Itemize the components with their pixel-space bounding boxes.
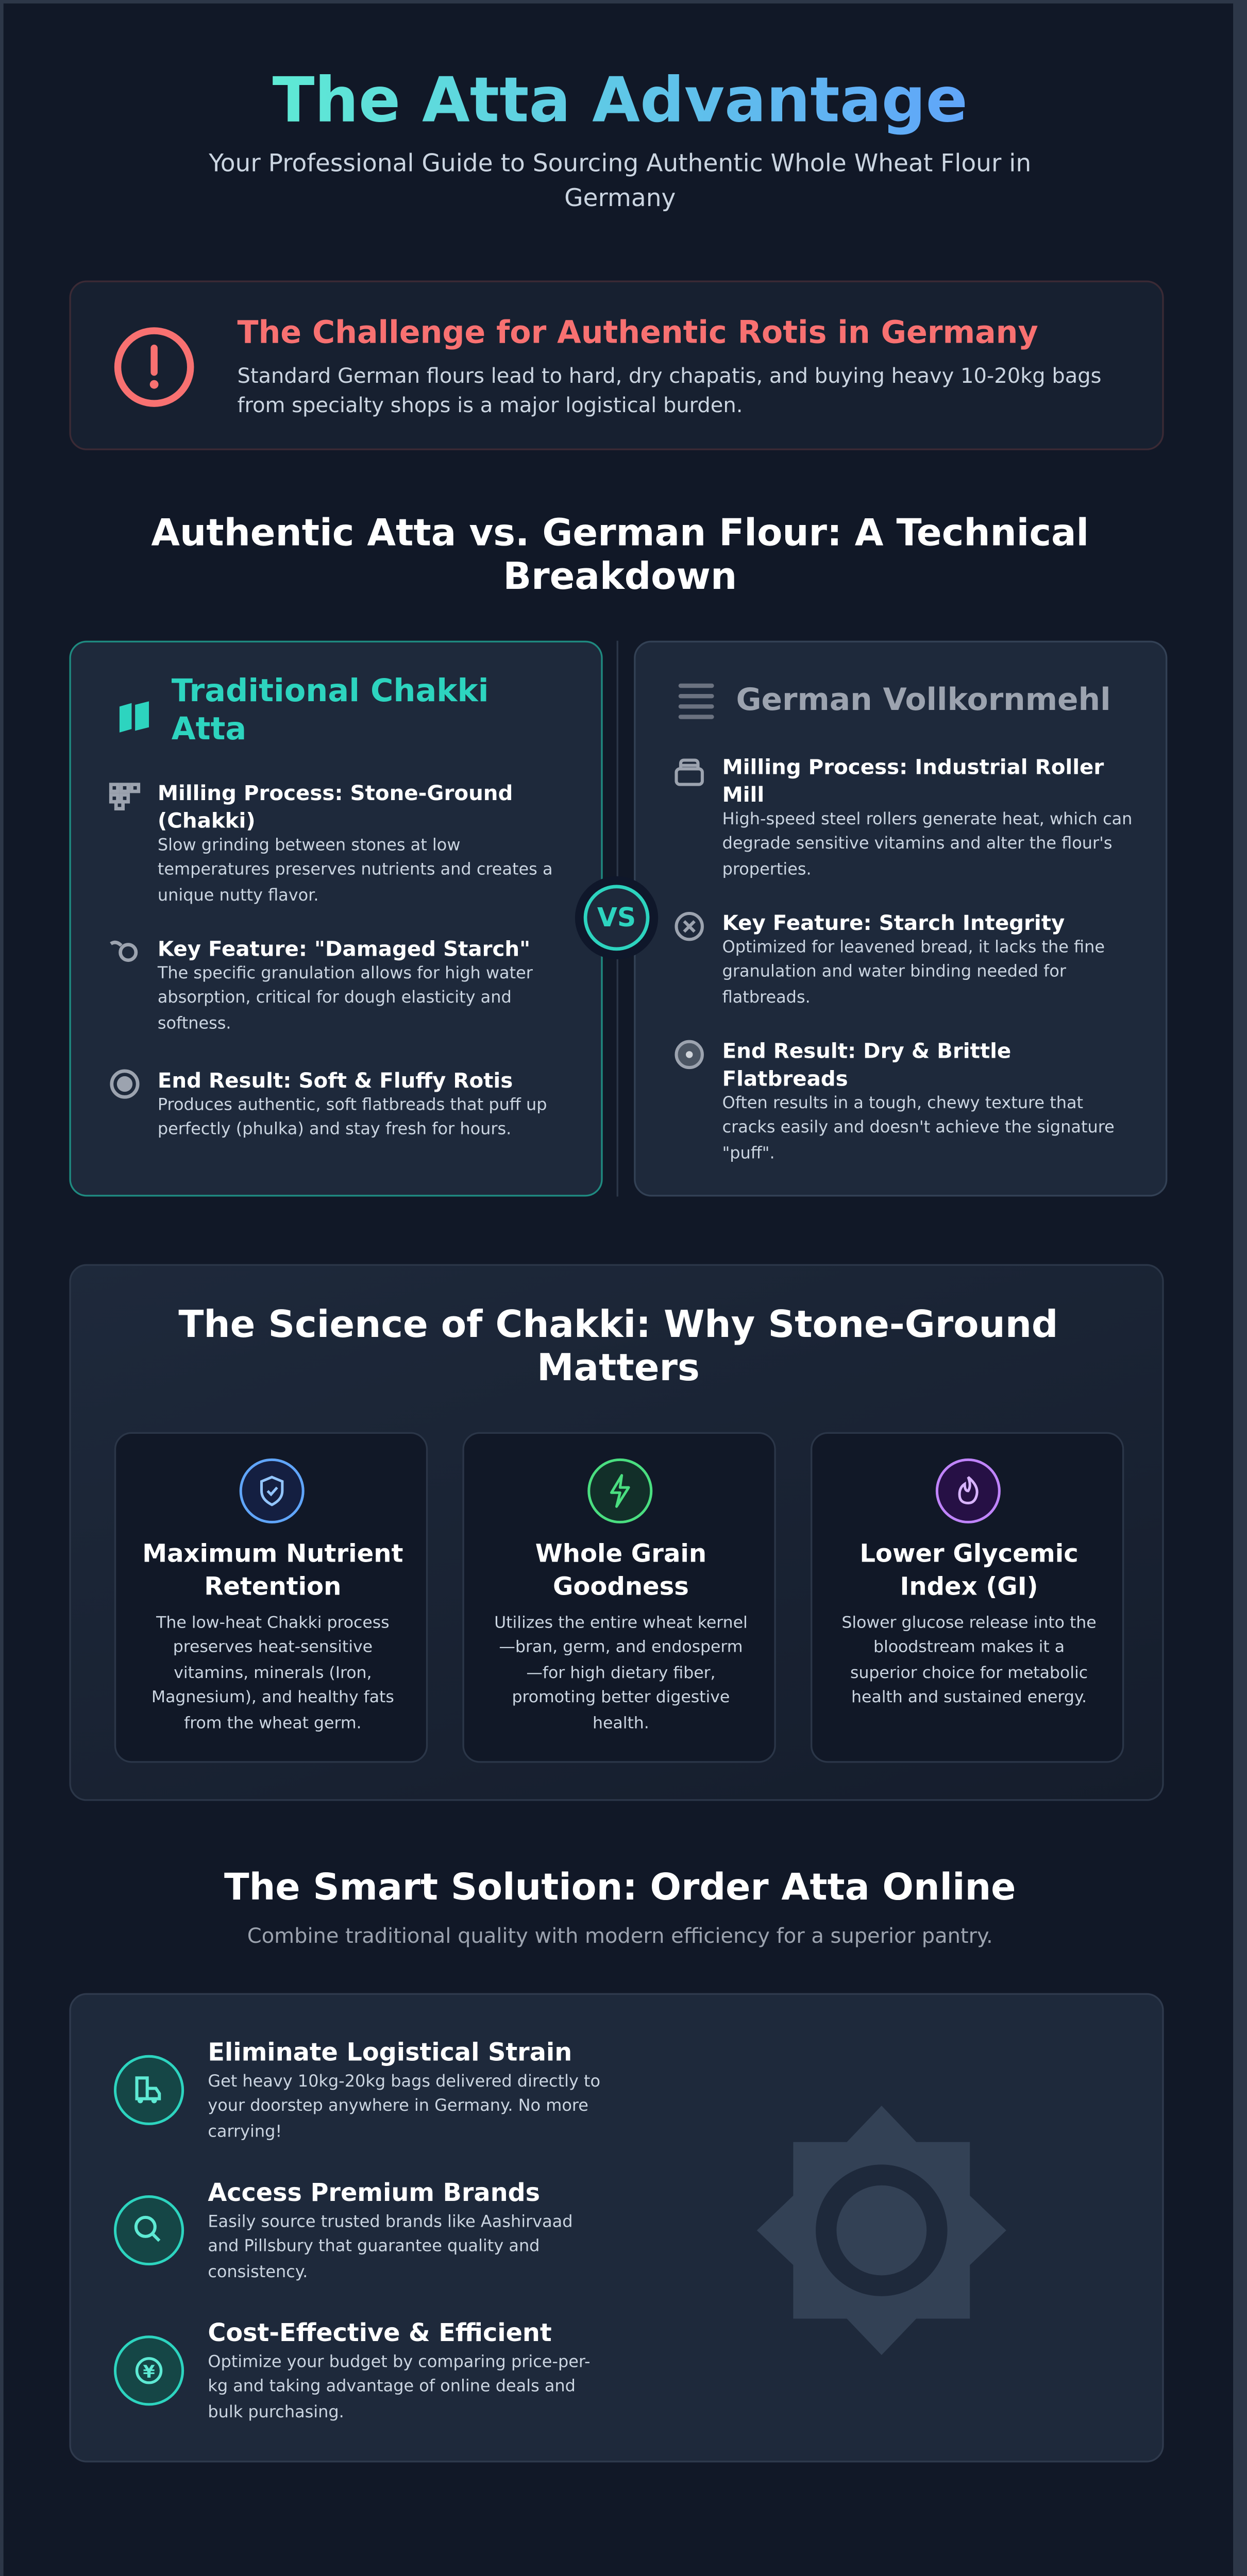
panel: solution [69, 1993, 1164, 2462]
item: roller mill [675, 755, 1132, 879]
subtitle: Your Professional Guide to Sourcing Authentic Whole Wheat Flour in [209, 150, 1031, 178]
item: roller mill: Mill [722, 783, 764, 807]
item: damaged starch: Key Feature: "Damaged Starch" [158, 937, 530, 961]
item: roller mill: properties. [722, 860, 812, 879]
icon: map [120, 701, 149, 733]
item: brands: Access Premium Brands [208, 2180, 540, 2208]
item: cost [112, 2317, 632, 2425]
icon: large gear [757, 2106, 1006, 2355]
card: whole grain: —for high dietary fiber, [526, 1664, 716, 1683]
icon: bolt [587, 1458, 652, 1523]
subheading: Combine traditional quality with modern efficiency for a superior pantry. [247, 1924, 993, 1948]
challenge text [237, 364, 1101, 416]
card: nutrient retention: preserves heat-sensitive [173, 1639, 373, 1658]
item: end result [110, 1069, 547, 1140]
card: glycemic index: bloodstream makes it a [873, 1639, 1065, 1658]
card: whole grain: Goodness [553, 1574, 689, 1602]
card: nutrient retention: The low-heat Chakki process [156, 1614, 390, 1633]
card: nutrient retention: vitamins, minerals (Iron, [174, 1664, 372, 1683]
card: glycemic index: Lower Glycemic [860, 1541, 1079, 1569]
card: glycemic index: health and sustained energy. [851, 1689, 1087, 1708]
vs badge [575, 876, 658, 959]
item: starch integrity: flatbreads. [722, 988, 811, 1007]
item: starch integrity: Optimized for leavened bread, it lacks the fine [722, 939, 1105, 958]
panel: science of chakki [69, 1264, 1164, 1801]
card: nutrient retention: Maximum Nutrient [142, 1541, 403, 1569]
panel: traditional chakki atta [69, 641, 603, 1197]
icon: flame [935, 1458, 1001, 1524]
subtitle [209, 150, 1031, 212]
item: milling: temperatures preserves nutrients and creates a [158, 861, 553, 880]
item: cost: Optimize your budget by comparing price-per- [208, 2353, 591, 2372]
heading: comparison: Authentic Atta vs. German Flour: A Technical [151, 513, 1089, 556]
card: whole grain: health. [593, 1714, 649, 1733]
card: nutrient retention [114, 1432, 428, 1763]
item: brands [112, 2177, 632, 2284]
item: dry brittle: Flatbreads [722, 1066, 848, 1091]
item: milling [109, 781, 553, 905]
icon: shield [239, 1458, 305, 1523]
heading: comparison [151, 513, 1089, 598]
heading: smart solution: The Smart Solution: Order Atta Online [224, 1865, 1016, 1908]
item: damaged starch: absorption, critical for dough elasticity and [158, 989, 512, 1008]
card: nutrient retention: Retention [204, 1574, 341, 1602]
item: roller mill: Milling Process: Industrial Roller [722, 755, 1104, 779]
item: roller mill: High-speed steel rollers generate heat, which can [722, 810, 1132, 829]
card: whole grain: promoting better digestive [512, 1689, 730, 1708]
item: damaged starch [110, 937, 533, 1033]
item: cost: Cost-Effective & Efficient [208, 2320, 552, 2348]
item: dry brittle: "puff". [722, 1144, 775, 1163]
item: brands: consistency. [208, 2263, 308, 2282]
item: roller mill: degrade sensitive vitamins and alter the flour's [722, 835, 1113, 854]
icon: warning [114, 327, 194, 407]
card: nutrient retention: Magnesium), and healthy fats [151, 1689, 394, 1708]
card: glycemic index: Index (GI) [900, 1574, 1038, 1602]
challenge text: Standard German flours lead to hard, dry chapatis, and buying heavy 10-20kg bags [237, 364, 1101, 388]
left title: Traditional Chakki [172, 673, 489, 710]
card: whole grain: Utilizes the entire wheat kernel [494, 1614, 748, 1633]
card: whole grain [462, 1432, 776, 1763]
item: starch integrity [675, 911, 1105, 1007]
panel: challenge [69, 280, 1164, 450]
card: whole grain: —bran, germ, and endosperm [499, 1639, 743, 1658]
item: end result: Produces authentic, soft flatbreads that puff up [158, 1096, 547, 1115]
item: cost: bulk purchasing. [208, 2403, 344, 2422]
item: logistics: carrying! [208, 2122, 282, 2141]
item: end result: End Result: Soft & Fluffy Rotis [158, 1069, 513, 1093]
panel: german vollkornmehl [634, 641, 1167, 1197]
item: dry brittle: Often results in a tough, chewy texture that [722, 1094, 1083, 1113]
card: glycemic index: superior choice for metabolic [850, 1664, 1088, 1683]
card: glycemic index [811, 1432, 1124, 1763]
item: milling: (Chakki) [158, 809, 256, 833]
item: starch integrity: granulation and water binding needed for [722, 963, 1066, 982]
item: dry brittle: cracks easily and doesn't achieve the signature [722, 1119, 1115, 1138]
item: brands: and Pillsbury that guarantee quality and [208, 2238, 540, 2257]
item: cost: kg and taking advantage of online deals and [208, 2378, 576, 2397]
card: glycemic index: Slower glucose release into the [841, 1614, 1097, 1633]
item: damaged starch: softness. [158, 1014, 231, 1033]
item: end result: perfectly (phulka) and stay fresh for hours. [158, 1121, 511, 1140]
heading: comparison: Breakdown [503, 555, 737, 598]
left title: Atta [172, 711, 246, 748]
item: dry brittle: End Result: Dry & Brittle [722, 1039, 1011, 1063]
challenge text: from specialty shops is a major logistical burden. [237, 392, 743, 416]
item: dry brittle [675, 1039, 1115, 1163]
item: brands: Easily source trusted brands like Aashirvaad [208, 2213, 573, 2232]
science heading [178, 1304, 1058, 1389]
card: nutrient retention: from the wheat germ. [184, 1714, 362, 1733]
item: logistics: your doorstep anywhere in Germany. No more [208, 2097, 588, 2116]
vs badge: VS [597, 902, 636, 934]
item: logistics: Get heavy 10kg-20kg bags delivered directly to [208, 2073, 600, 2092]
item: milling: Slow grinding between stones at low [158, 836, 460, 855]
right title: German Vollkornmehl [736, 682, 1111, 719]
item: starch integrity: Key Feature: Starch Integrity [722, 911, 1065, 935]
item: logistics [112, 2037, 632, 2144]
item: damaged starch: The specific granulation allows for high water [158, 964, 533, 984]
item: logistics: Eliminate Logistical Strain [208, 2040, 572, 2067]
item: milling: Milling Process: Stone-Ground [158, 781, 513, 805]
science heading: Matters [537, 1346, 700, 1389]
subtitle: Germany [564, 184, 676, 212]
icon: lines [678, 683, 714, 719]
item: cost: ¥ [143, 2362, 155, 2382]
card: whole grain: Whole Grain [535, 1541, 706, 1569]
left title [172, 673, 489, 748]
science heading: The Science of Chakki: Why Stone-Ground [178, 1304, 1058, 1347]
item: milling: unique nutty flavor. [158, 886, 319, 905]
challenge heading: The Challenge for Authentic Rotis in Germany [237, 315, 1038, 351]
divider line [617, 641, 618, 1197]
title: The Atta Advantage [273, 66, 968, 137]
